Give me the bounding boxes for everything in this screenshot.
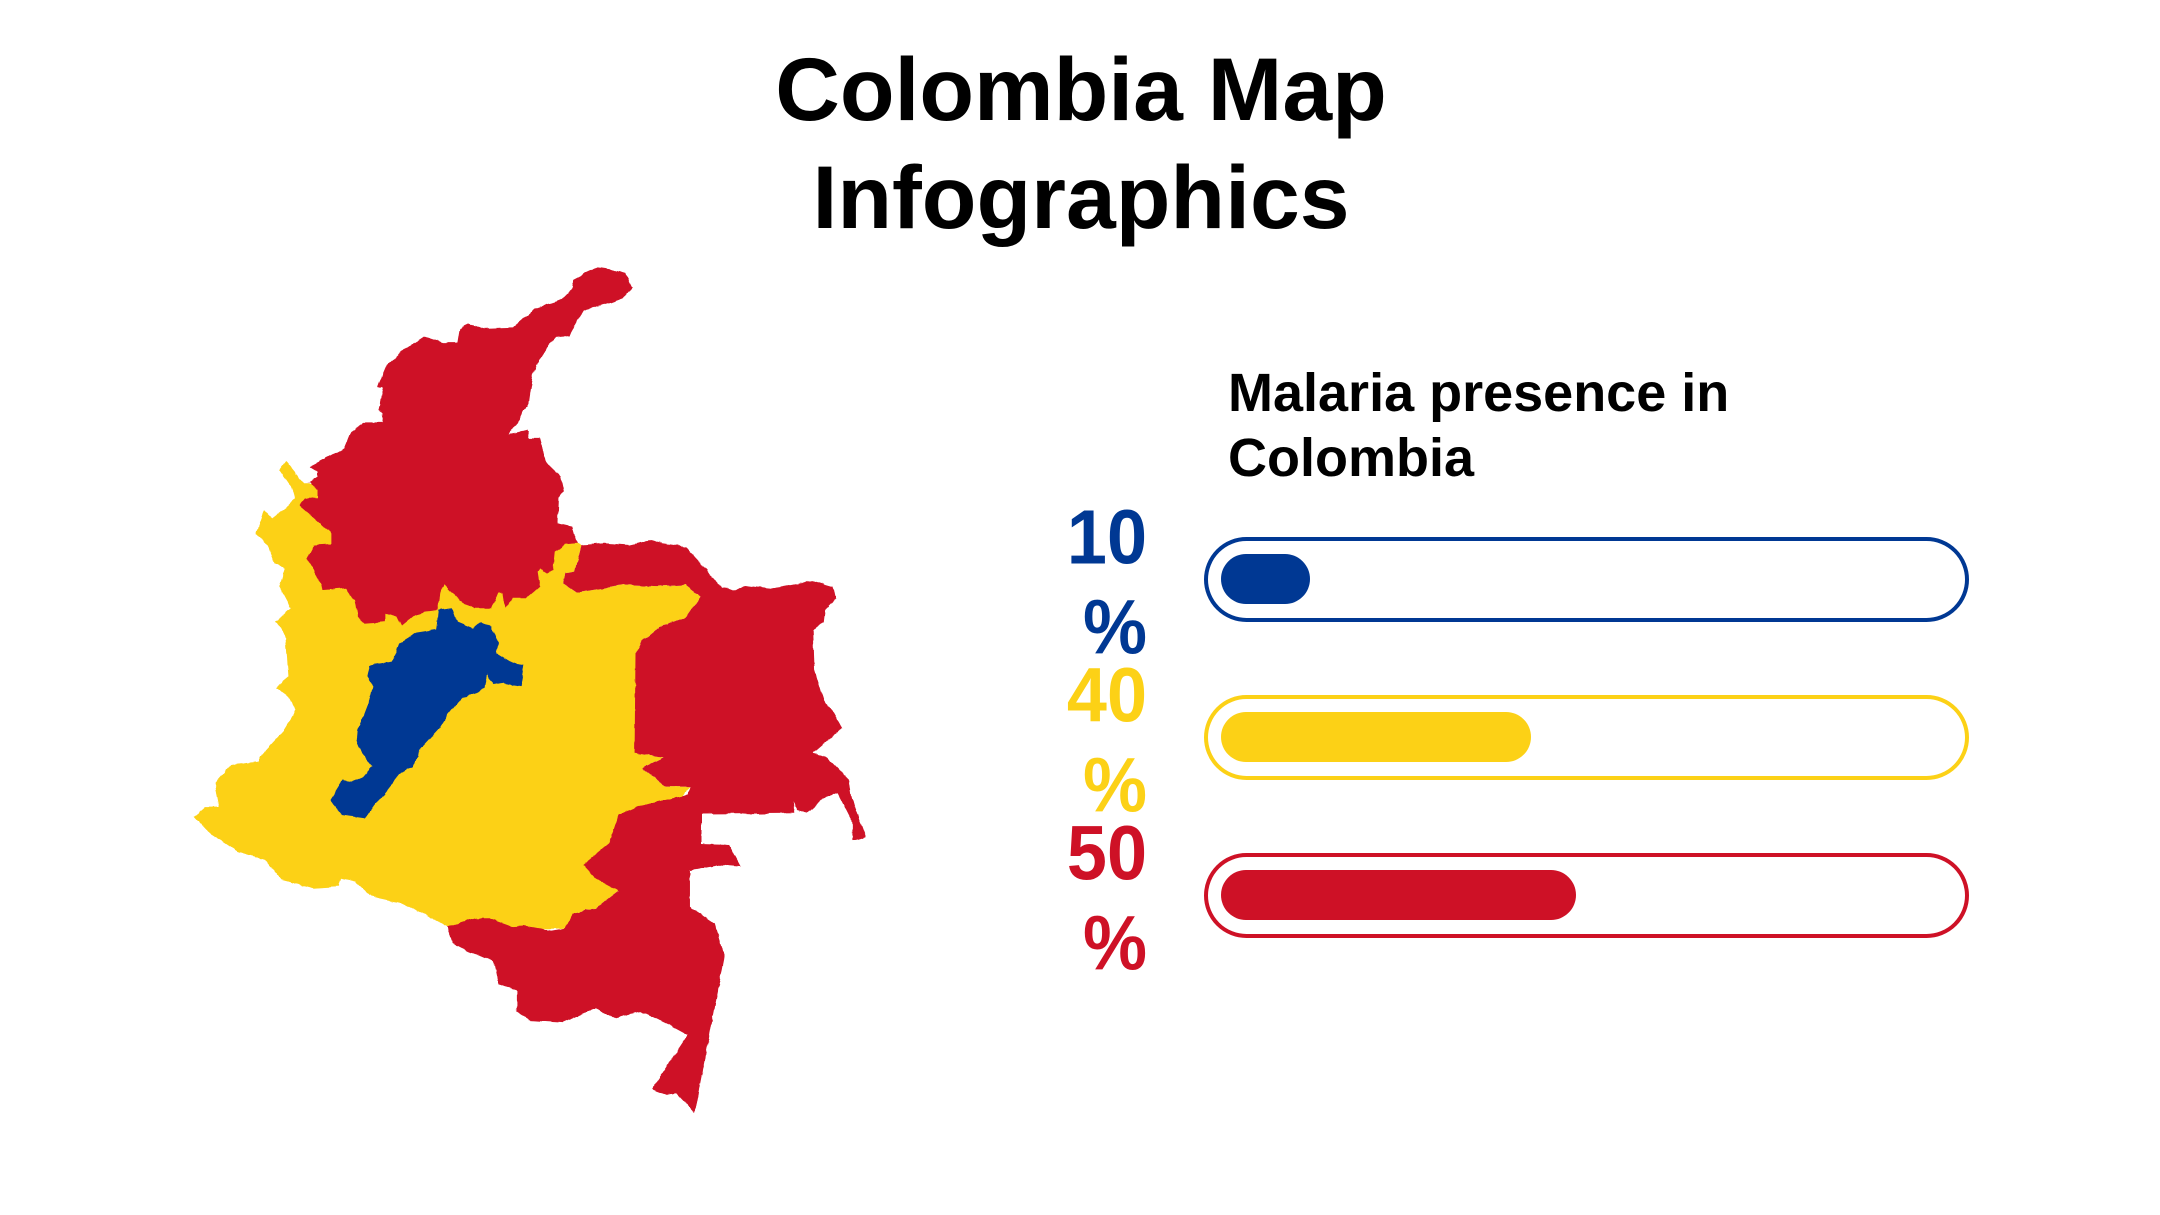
- value: 40%: 40: [1067, 653, 1147, 739]
- map region: red north 50%: [299, 267, 632, 626]
- value: 50%: 50: [1067, 811, 1147, 897]
- map region: blue 10%: [330, 608, 524, 818]
- value: 10%: [1067, 495, 1147, 671]
- value: 50%: [1067, 811, 1147, 987]
- bar fill: 10%: [1221, 554, 1310, 604]
- value: 40%: [1067, 653, 1147, 829]
- value: 10%: %: [1083, 585, 1147, 671]
- heading: Malaria presence in Colombia: Malaria presence in Colombia: [1228, 363, 1729, 488]
- bar track: 10%: [1204, 537, 1969, 622]
- map region: yellow 40%: [194, 461, 701, 930]
- title: [775, 39, 1387, 247]
- value: 40%: %: [1083, 743, 1147, 829]
- bar track: 50%: [1204, 853, 1969, 938]
- title: Infographics: [812, 147, 1350, 247]
- bar fill: 40%: [1221, 712, 1531, 762]
- title: Colombia Map: [775, 39, 1387, 139]
- bar fill: 50%: [1221, 870, 1576, 920]
- value: 50%: %: [1083, 901, 1147, 987]
- bar track: 40%: [1204, 695, 1969, 780]
- map region: red east and south 50%: [448, 541, 866, 1113]
- value: 10%: 10: [1067, 495, 1147, 581]
